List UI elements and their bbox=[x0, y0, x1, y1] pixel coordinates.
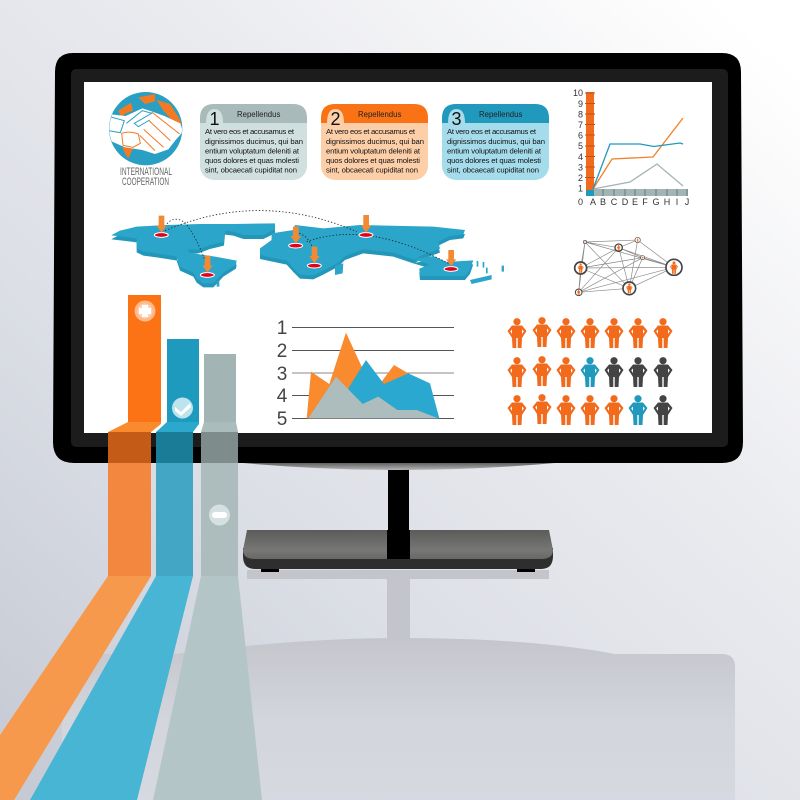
card 3: entium voluptatum deleniti at bbox=[447, 146, 542, 156]
stand reflection bbox=[247, 570, 549, 639]
card 3: sint, obcaecati cupiditat non bbox=[447, 166, 539, 174]
y axis labels: 6 bbox=[578, 130, 583, 140]
orange line bbox=[593, 118, 683, 189]
axis ticks bbox=[585, 93, 595, 178]
monitor chin shadow bbox=[232, 462, 566, 470]
pin: north america bbox=[154, 216, 168, 237]
card 2 bbox=[321, 104, 428, 180]
area chart bbox=[277, 318, 454, 430]
x axis labels: C bbox=[611, 197, 618, 207]
y axis labels: 0 bbox=[578, 197, 583, 207]
network node figures bbox=[577, 238, 678, 295]
logo globe and handshake bbox=[108, 92, 183, 165]
area chart labels bbox=[277, 318, 288, 430]
card 2: Repellendus bbox=[358, 110, 401, 119]
card 3: dignissimos ducimus, qui ban bbox=[447, 137, 545, 146]
card 2: entium voluptatum deleniti at bbox=[326, 146, 421, 156]
ribbon: gray bbox=[153, 354, 262, 800]
card 1: dignissimos ducimus, qui ban bbox=[205, 137, 303, 146]
x axis labels: H bbox=[664, 197, 670, 207]
x axis labels: I bbox=[676, 197, 678, 207]
table reflection bbox=[62, 638, 735, 800]
card 1: entium voluptatum deleniti at bbox=[205, 146, 300, 156]
icon: plus bbox=[134, 300, 156, 322]
card 1 bbox=[200, 104, 307, 180]
monitor outer frame bbox=[53, 53, 743, 463]
y axis labels: 9 bbox=[578, 99, 583, 109]
logo caption: INTERNATIONAL bbox=[120, 166, 172, 178]
route lines bbox=[163, 211, 448, 267]
x axis bar bbox=[594, 189, 688, 196]
network diagram bbox=[575, 237, 682, 296]
x axis labels: G bbox=[652, 197, 660, 207]
y axis labels: 8 bbox=[578, 110, 583, 120]
x axis labels bbox=[590, 197, 689, 207]
card 1: quos dolores et quas molesti bbox=[205, 156, 299, 165]
card 3: At vero eos et accusamus et bbox=[447, 127, 537, 136]
card 1: 1 bbox=[210, 109, 220, 129]
card 1: Repellendus bbox=[237, 110, 280, 119]
y axis labels: 7 bbox=[578, 120, 583, 130]
pin: europe bbox=[289, 227, 303, 248]
map extrusion bbox=[112, 227, 473, 287]
network nodes bbox=[575, 237, 682, 296]
monitor stand bbox=[243, 466, 553, 572]
ribbon: blue bbox=[30, 339, 199, 800]
network links bbox=[579, 240, 674, 292]
area chart labels: 2 bbox=[277, 341, 287, 362]
logo caption bbox=[120, 166, 172, 188]
y axis labels: 1 bbox=[578, 184, 583, 194]
area chart labels: 5 bbox=[277, 409, 287, 430]
gray line bbox=[593, 164, 683, 189]
stand base bbox=[243, 530, 553, 572]
pin: asia bbox=[359, 215, 373, 237]
x axis labels: J bbox=[685, 197, 689, 207]
icon: minus bbox=[209, 504, 230, 526]
area chart series bbox=[307, 333, 439, 418]
area chart labels: 3 bbox=[277, 364, 287, 385]
people row 2 bbox=[508, 356, 672, 387]
ribbon: orange bbox=[0, 295, 161, 800]
card 3: Repellendus bbox=[479, 110, 522, 119]
area chart labels: 4 bbox=[277, 386, 288, 407]
x axis labels: E bbox=[632, 197, 638, 207]
x axis labels: F bbox=[642, 197, 648, 207]
logo caption: COOPERATION bbox=[122, 176, 169, 188]
logo: international cooperation bbox=[108, 92, 183, 188]
icon: check bbox=[172, 398, 193, 418]
x axis labels: B bbox=[600, 197, 606, 207]
y axis labels: 4 bbox=[578, 152, 583, 162]
stand neck bbox=[388, 466, 409, 532]
card 2: dignissimos ducimus, qui ban bbox=[326, 137, 424, 146]
card 2: sint, obcaecati cupiditat non bbox=[326, 166, 418, 174]
card 3: 3 bbox=[452, 109, 462, 129]
y axis labels: 3 bbox=[578, 162, 583, 172]
card 2: At vero eos et accusamus et bbox=[326, 127, 416, 136]
blue line bbox=[593, 143, 683, 189]
world map bbox=[112, 211, 504, 287]
pin: south america bbox=[200, 256, 214, 277]
y axis labels: 2 bbox=[578, 173, 583, 183]
map continents bbox=[112, 223, 504, 287]
y axis labels: 5 bbox=[578, 141, 583, 151]
screen bbox=[84, 82, 712, 433]
monitor bbox=[53, 53, 743, 463]
card 1: At vero eos et accusamus et bbox=[205, 127, 295, 136]
card 2: quos dolores et quas molesti bbox=[326, 156, 420, 165]
line chart bbox=[573, 88, 689, 207]
monitor inner bezel bbox=[71, 69, 728, 447]
pin: africa bbox=[307, 247, 321, 268]
y axis labels: 10 bbox=[573, 88, 583, 98]
x axis labels: D bbox=[622, 197, 629, 207]
people row 1 bbox=[508, 317, 672, 348]
pin: australia bbox=[444, 250, 458, 271]
area chart labels: 1 bbox=[277, 318, 287, 339]
card 3 bbox=[442, 104, 549, 180]
card 1: sint, obcaecati cupiditat non bbox=[205, 166, 297, 174]
x axis labels: A bbox=[590, 197, 596, 207]
people row 3 bbox=[508, 394, 672, 425]
y axis labels bbox=[573, 88, 583, 207]
area chart grid lines bbox=[292, 328, 454, 418]
card 3: quos dolores et quas molesti bbox=[447, 156, 541, 165]
card 2: 2 bbox=[330, 109, 341, 129]
y axis bar bbox=[586, 92, 594, 190]
